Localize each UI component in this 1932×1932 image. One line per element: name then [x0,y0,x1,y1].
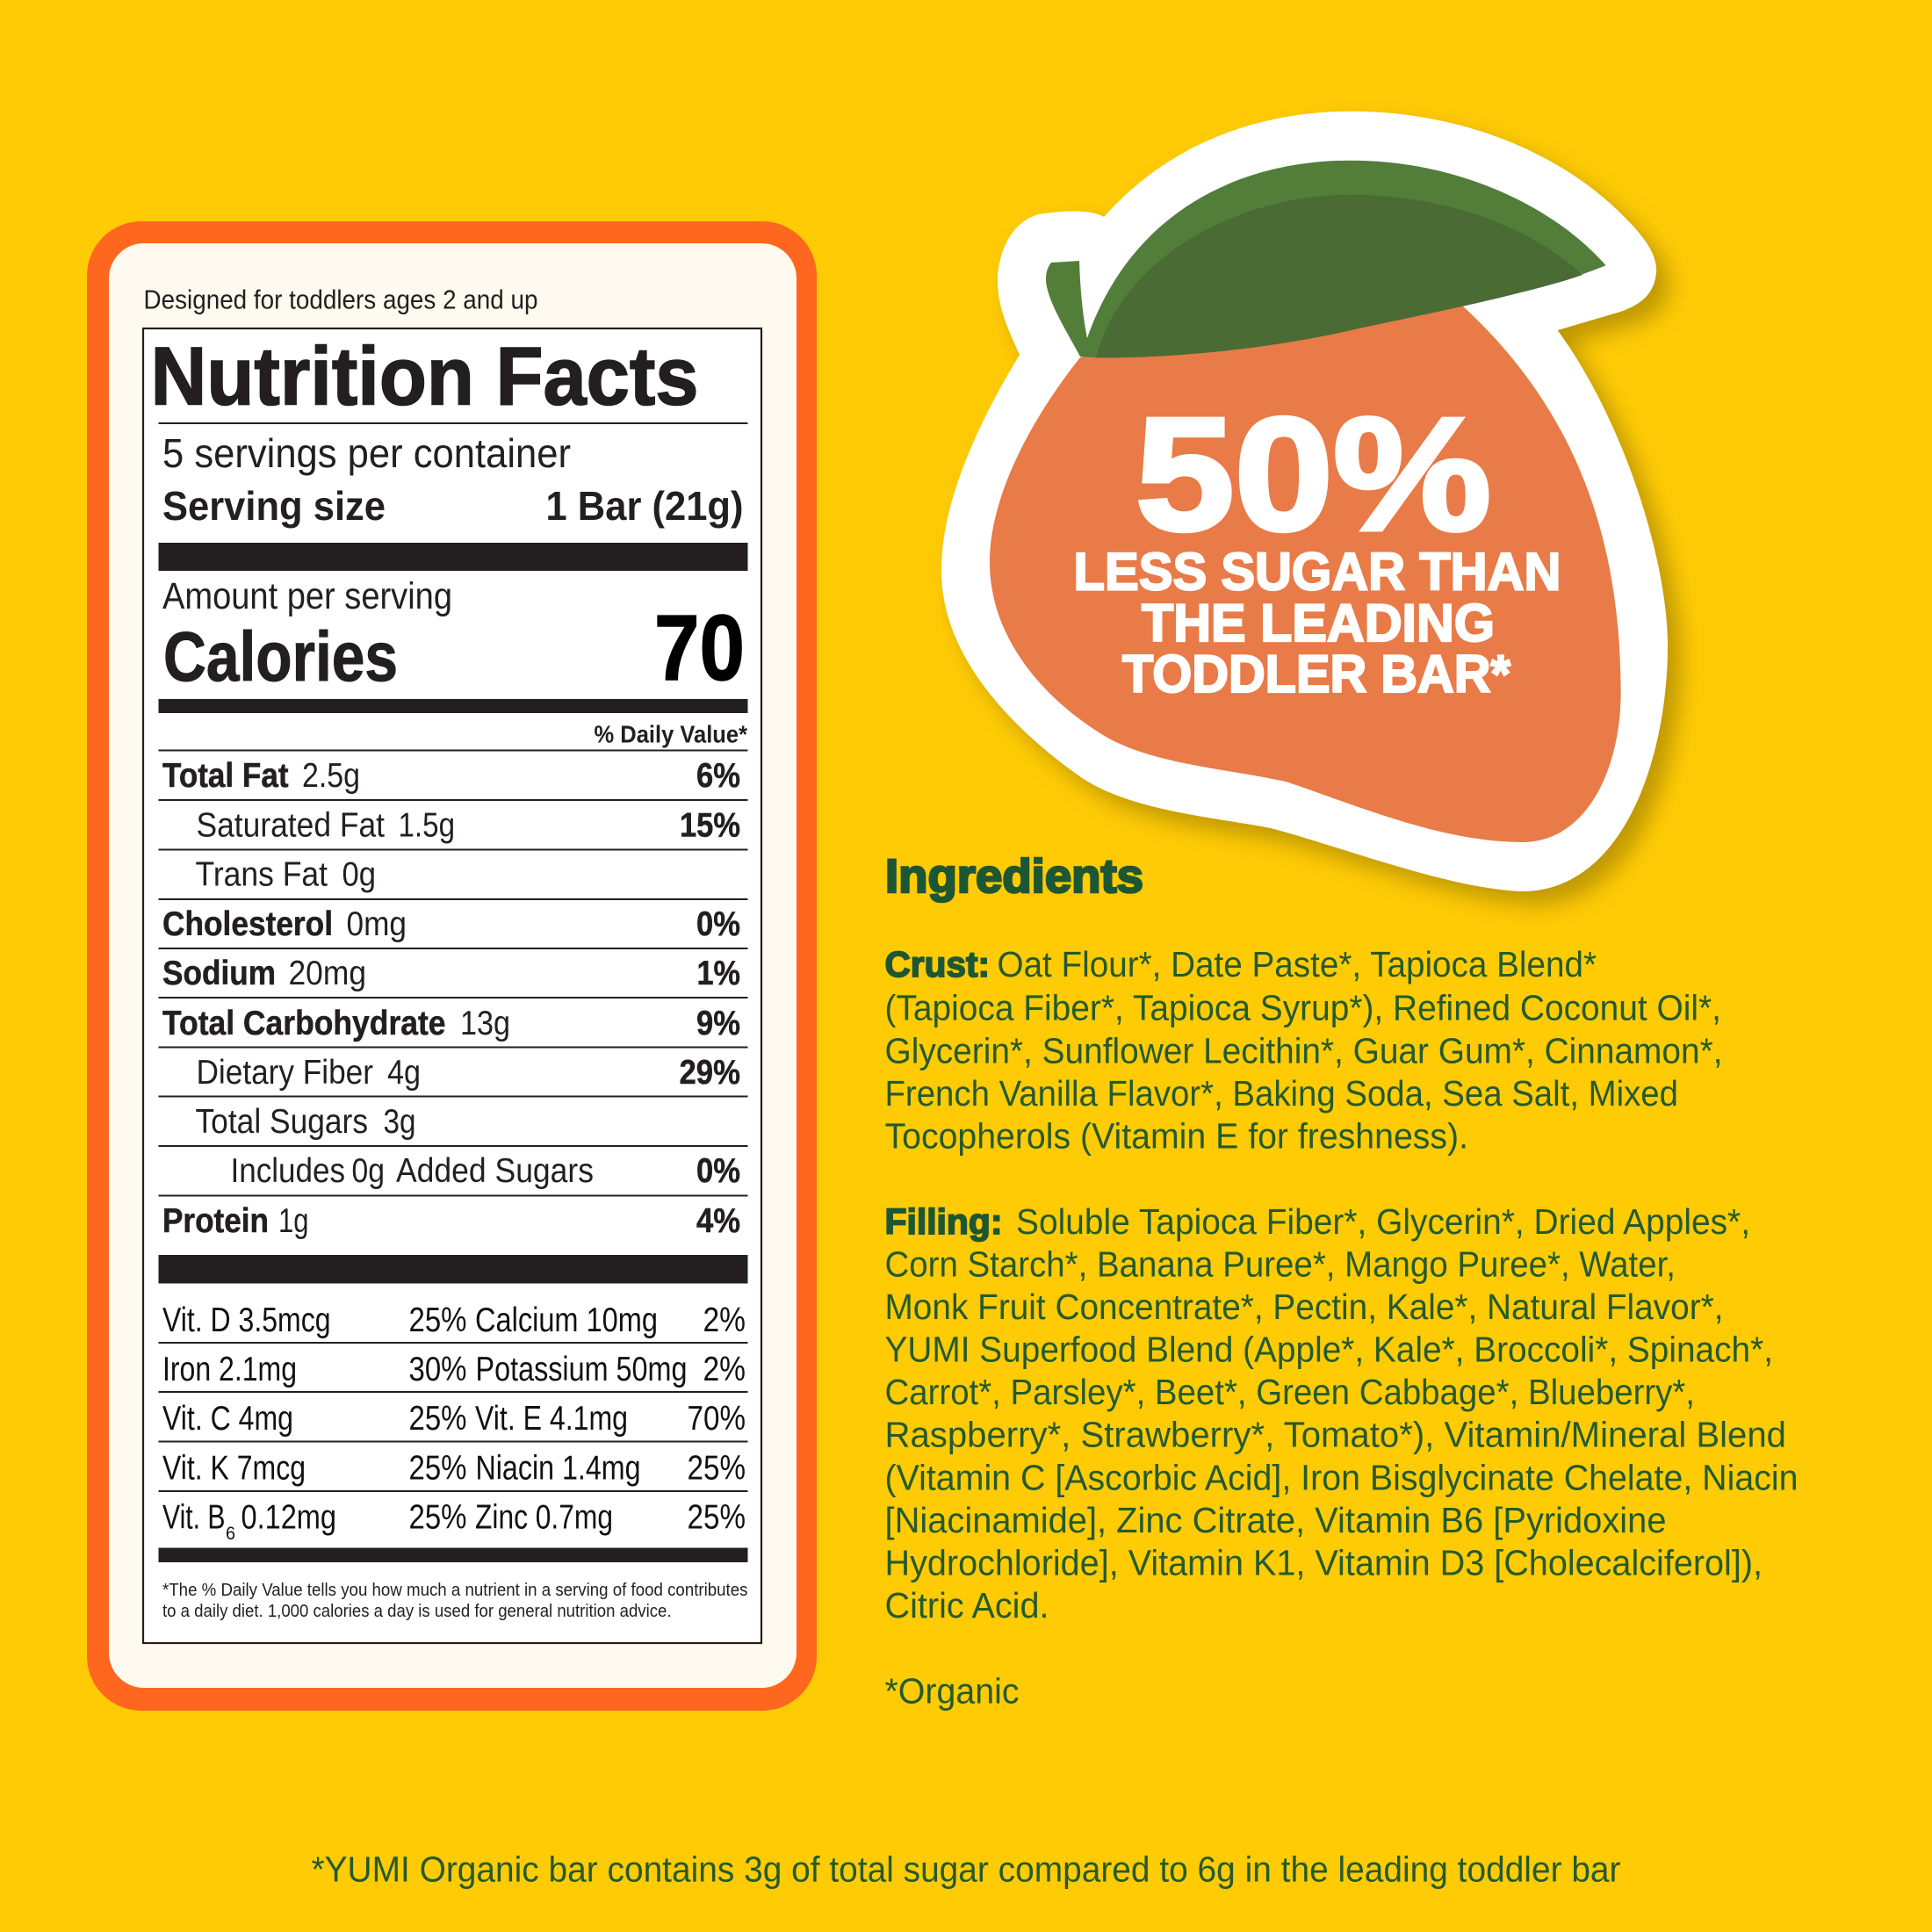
icon: mango badge [941,112,1668,891]
footnote: daily value [162,1580,748,1621]
text block: filling ingredients: Raspberry*, Strawberry*, Tomato*), Vitamin/Mineral Blend [885,1414,1786,1454]
text block: crust ingredients: Tocopherols (Vitamin E for freshness). [885,1115,1468,1156]
row: total sugars: 3g [383,1103,416,1141]
text block: filling ingredients: Carrot*, Parsley*, Beet*, Green Cabbage*, Blueberry*, [885,1372,1695,1412]
row: sodium: 20mg [288,955,366,992]
servings per container: 5 servings per container [162,430,571,476]
callout: 50%: 50% [1135,384,1491,564]
text block: crust ingredients: Oat Flour*, Date Paste*, Tapioca Blend* [998,944,1597,984]
row: vitamin B6 and zinc: Vit. B [162,1498,225,1537]
row: added sugars [230,1152,740,1190]
text block: filling ingredients: YUMI Superfood Blend (Apple*, Kale*, Broccoli*, Spinach*, [885,1330,1773,1370]
text block: crust ingredients: French Vanilla Flavor*, Baking Soda, Sea Salt, Mixed [885,1073,1678,1114]
text block: filling ingredients: Corn Starch*, Banana Puree*, Mango Puree*, Water, [885,1244,1676,1284]
row: iron and potassium: Potassium 50mg [476,1351,687,1388]
text block: crust ingredients: (Tapioca Fiber*, Tapioca Syrup*), Refined Coconut Oil*, [885,987,1721,1027]
row: cholesterol: 0% [696,905,740,943]
row: vitamin C and vitamin E: Vit. C 4mg [162,1400,293,1438]
row: protein [162,1202,740,1240]
row: total fat: Total Fat [162,757,289,795]
row: added sugars: 0g [351,1152,385,1190]
text block: crust ingredients: Crust: [885,944,990,984]
text block: filling ingredients: Monk Fruit Concentrate*, Pectin, Kale*, Natural Flavor*, [885,1287,1723,1327]
row: total fat [162,757,740,795]
nutrition label box [143,328,761,1643]
text block: filling ingredients: Hydrochloride], Vitamin K1, Vitamin D3 [Cholecalciferol]), [885,1542,1763,1582]
row: vitamin D and calcium [162,1301,746,1339]
row: vitamin B6 and zinc [162,1498,746,1544]
footnote: daily value: to a daily diet. 1,000 calories a day is used for general nutrition advice. [162,1601,671,1621]
panel: nutrition card [87,221,817,1711]
row: saturated fat [197,806,740,845]
row: iron and potassium: 2% [703,1351,746,1388]
callout: less sugar text: TODDLER BAR* [1122,645,1511,703]
callout: less sugar text: THE LEADING [1142,594,1495,652]
text: age note: Designed for toddlers ages 2 and up [144,285,537,314]
text block: filling ingredients: Citric Acid. [885,1585,1049,1626]
row: total fat: 2.5g [302,757,360,795]
mango leaf and stem [1046,161,1606,357]
calories [163,596,745,700]
text block: crust ingredients [885,944,1723,1156]
row: sodium [162,955,740,992]
row: vitamin K and niacin [162,1449,746,1488]
row: iron and potassium: 30% [409,1351,467,1388]
heading: Nutrition Facts: Nutrition Facts [151,330,699,422]
row: dietary fiber: 29% [680,1054,740,1092]
serving size: Serving size [162,483,386,529]
calories: 70 [654,596,745,700]
row: vitamin B6 and zinc: Zinc 0.7mg [475,1498,613,1537]
row: total carbohydrate: Total Carbohydrate [162,1005,446,1042]
row: dietary fiber: 4g [387,1054,421,1092]
row: trans fat: Trans Fat [195,855,328,894]
row: vitamin B6 and zinc: 6 [226,1524,235,1544]
text block: filling ingredients: Soluble Tapioca Fiber*, Glycerin*, Dried Apples*, [1016,1201,1750,1242]
row: dietary fiber [197,1054,740,1092]
row: vitamin B6 and zinc: 25% [409,1498,467,1537]
text block: filling ingredients: [Niacinamide], Zinc Citrate, Vitamin B6 [Pyridoxine [885,1500,1667,1540]
row: sodium: 1% [697,955,740,992]
row: added sugars: Includes [230,1152,345,1190]
row: added sugars: Added Sugars [396,1152,594,1190]
row: total sugars: Total Sugars [195,1103,368,1141]
row: vitamin D and calcium: 2% [703,1301,746,1339]
row: protein: 1g [278,1202,309,1240]
text block: filling ingredients [885,1201,1799,1626]
mango body [990,305,1621,842]
text block: filling ingredients: Filling: [885,1201,1003,1242]
row: saturated fat: 15% [680,806,740,845]
callout: less sugar text [1073,543,1561,703]
row: cholesterol: Cholesterol [162,905,333,943]
row: total fat: 6% [696,757,740,795]
row: sodium: Sodium [162,955,276,992]
row: vitamin K and niacin: 25% [409,1449,467,1488]
row: vitamin B6 and zinc: 0.12mg [241,1498,336,1537]
row: iron and potassium [162,1351,746,1388]
row: vitamin C and vitamin E [162,1400,746,1438]
footnote: daily value: *The % Daily Value tells you how much a nutrient in a serving of food contributes [162,1580,748,1600]
row: vitamin K and niacin: 25% [687,1449,746,1488]
row: added sugars: 0% [696,1152,740,1190]
row: vitamin C and vitamin E: 70% [687,1400,746,1438]
daily value header: % Daily Value* [594,720,747,748]
callout: less sugar text: LESS SUGAR THAN [1073,543,1561,601]
row: protein: 4% [696,1202,740,1240]
row: vitamin K and niacin: Niacin 1.4mg [476,1449,641,1488]
row: vitamin D and calcium: 25% [409,1301,467,1339]
row: vitamin C and vitamin E: Vit. E 4.1mg [475,1400,628,1438]
row: cholesterol: 0mg [346,905,407,943]
row: trans fat: 0g [342,855,376,894]
calories: Calories [163,617,398,696]
amount per serving: Amount per serving [162,575,452,617]
row: dietary fiber: Dietary Fiber [197,1054,373,1092]
row: vitamin C and vitamin E: 25% [409,1400,467,1438]
row: total carbohydrate: 13g [460,1005,510,1042]
row: total carbohydrate: 9% [696,1005,740,1042]
row: cholesterol [162,905,740,943]
row: vitamin K and niacin: Vit. K 7mcg [162,1449,306,1488]
row: protein: Protein [162,1202,269,1240]
text block: filling ingredients: (Vitamin C [Ascorbic Acid], Iron Bisglycinate Chelate, Niacin [885,1458,1799,1498]
row: saturated fat: Saturated Fat [197,806,385,845]
row: vitamin D and calcium: Calcium 10mg [475,1301,658,1339]
row: vitamin B6 and zinc: 25% [687,1498,746,1537]
text block: crust ingredients: Glycerin*, Sunflower Lecithin*, Guar Gum*, Cinnamon*, [885,1031,1723,1071]
text: organic note: *Organic [885,1670,1019,1711]
row: vitamin D and calcium: Vit. D 3.5mcg [162,1301,330,1339]
row: iron and potassium: Iron 2.1mg [162,1351,297,1388]
footnote: sugar comparison: *YUMI Organic bar contains 3g of total sugar compared to 6g in the leading toddler bar [311,1849,1621,1890]
heading: Ingredients: Ingredients [885,850,1143,903]
serving size: 1 Bar (21g) [546,483,743,529]
serving size [162,483,743,529]
row: total carbohydrate [162,1005,740,1042]
row: saturated fat: 1.5g [399,806,455,845]
